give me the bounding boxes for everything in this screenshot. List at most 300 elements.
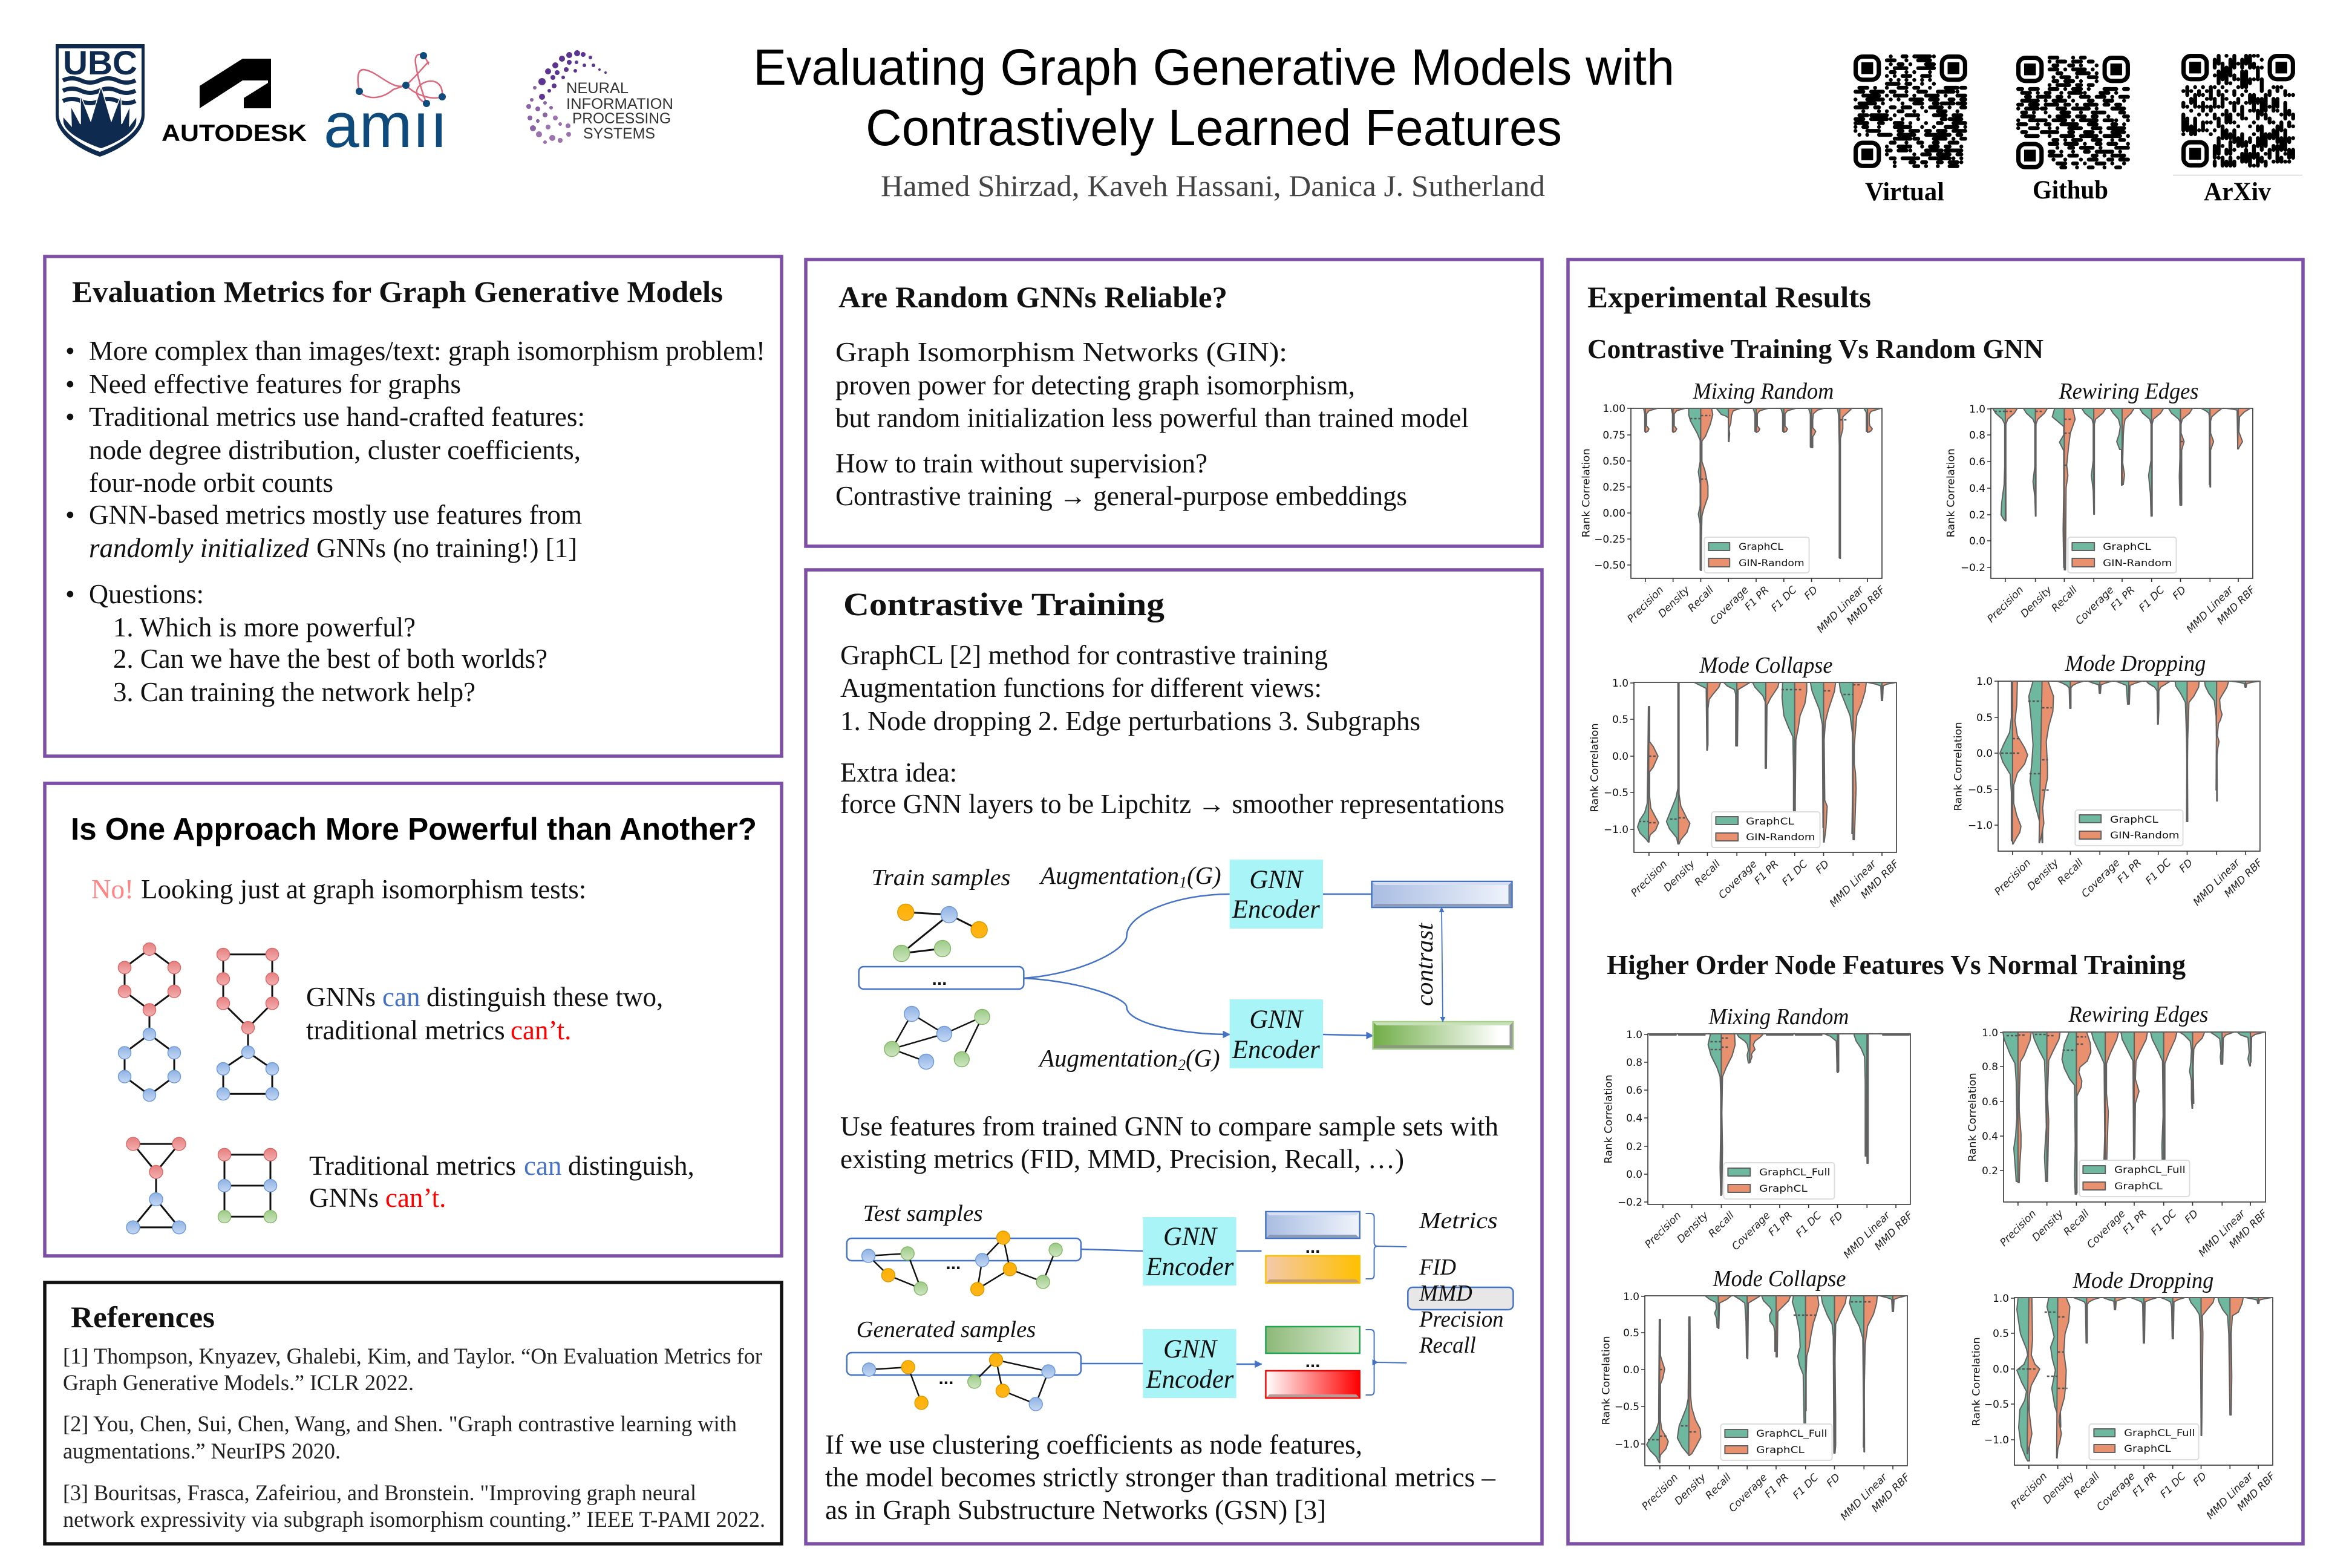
sample batch box (859, 967, 1024, 989)
title (753, 39, 1674, 156)
QR labels (1865, 175, 2302, 206)
reference list: augmentations.” NeurIPS 2020. (63, 1439, 341, 1464)
panel: experimental results (1568, 260, 2303, 1544)
body text: Graph Isomorphism Networks (GIN): (835, 337, 1287, 367)
chart: mode dropping (GraphCL_Full vs GraphCL): MMD Linear (2204, 1469, 2256, 1521)
intro text: Augmentation functions for different views: (840, 673, 1322, 703)
panel: contrastive training (806, 570, 1542, 1544)
logo: Neural Information Processing Systems: PROCESSING (572, 110, 671, 127)
chart: rewiring edges (GraphCL_Full vs GraphCL): MMD RBF (2227, 1207, 2270, 1250)
test samples batch (847, 1231, 1081, 1296)
chart: rewiring edges (GraphCL_Full vs GraphCL): 0.4 (1982, 1130, 1998, 1142)
chart: mode dropping (GraphCL vs GIN-Random): 1.0 (1976, 675, 1993, 687)
chart: mode dropping (GraphCL_Full vs GraphCL): Density (2040, 1469, 2077, 1506)
chart: mode dropping (GraphCL_Full vs GraphCL): MMD RBF (2235, 1469, 2278, 1513)
chart: mode dropping (GraphCL_Full vs GraphCL): −0.5 (1984, 1398, 2009, 1410)
label: augmentation 2: (G) (1186, 1045, 1220, 1072)
chart: mode collapse (GraphCL vs GIN-Random): F1 PR (1752, 858, 1781, 887)
title: Evaluating Graph Generative Models with (753, 39, 1674, 96)
chart: rewiring edges (GraphCL vs GIN-Random): 0.0 (1969, 535, 1985, 547)
embedding bar: blue (1372, 881, 1512, 907)
reference list: network expressivity via subgraph isomorphism counting.” IEEE T-PAMI 2022. (63, 1508, 765, 1532)
chart: mode collapse (GraphCL_Full vs GraphCL): F1 DC (1791, 1471, 1821, 1501)
sample graph 1 (893, 904, 987, 962)
label: test samples: Test samples (863, 1201, 983, 1226)
bullet list: Traditional metrics use hand-crafted features: (89, 402, 585, 432)
chart: mode dropping (GraphCL vs GIN-Random): 0.0 (1976, 747, 1993, 759)
chart: mode collapse (GraphCL vs GIN-Random): Density (1661, 857, 1697, 893)
generated samples batch: ... (938, 1368, 953, 1388)
chart: rewiring edges (GraphCL vs GIN-Random): 0.8 (1969, 429, 1985, 441)
text: traditional metrics can distinguish: can (524, 1151, 561, 1181)
chart: mode dropping (GraphCL vs GIN-Random): GIN-Random (2110, 829, 2180, 841)
chart: mixing random (GraphCL_Full vs GraphCL): 0.0 (1626, 1168, 1642, 1180)
embedding bars: generated: ... (1305, 1351, 1320, 1371)
chart: rewiring edges (GraphCL vs GIN-Random): MMD Linear (2184, 583, 2236, 635)
logo: amii (324, 52, 448, 161)
chart: mode dropping (GraphCL_Full vs GraphCL) (1970, 1268, 2278, 1521)
chart: mode collapse (GraphCL vs GIN-Random): MMD Linear (1827, 857, 1879, 909)
chart: rewiring edges (GraphCL vs GIN-Random): Recall (2049, 583, 2079, 614)
embedding bars: test (1266, 1212, 1360, 1283)
diagram: contrastive training pipeline (859, 860, 1513, 1074)
GNN encoder test: Encoder (1146, 1253, 1234, 1281)
logo: amii: amıı (324, 90, 448, 161)
chart: mixing random (GraphCL vs GIN-Random): 1.00 (1602, 402, 1625, 414)
chart: mixing random (GraphCL vs GIN-Random): 0.50 (1602, 455, 1625, 467)
chart: mode dropping (GraphCL_Full vs GraphCL): Precision (2008, 1470, 2050, 1511)
chart: mode dropping (GraphCL vs GIN-Random): F1 PR (2115, 857, 2144, 886)
reference list: [2] You, Chen, Sui, Chen, Wang, and Shen. "Graph contrastive learning with (63, 1412, 737, 1437)
middle text: Use features from trained GNN to compare sample sets with (840, 1111, 1498, 1142)
chart: rewiring edges (GraphCL_Full vs GraphCL): Density (2030, 1207, 2066, 1243)
brackets and arrows to metrics (1366, 1214, 1406, 1395)
chart: mixing random (GraphCL vs GIN-Random): Rank Correlation (1579, 448, 1592, 538)
QR code: Virtual (1855, 56, 1965, 166)
chart: mode collapse (GraphCL vs GIN-Random): GraphCL (1746, 815, 1794, 827)
chart: mixing random (GraphCL_Full vs GraphCL): Recall (1706, 1209, 1736, 1240)
GNN encoder 1: GNN (1249, 866, 1304, 894)
chart: mixing random (GraphCL_Full vs GraphCL): F1 PR (1766, 1209, 1795, 1238)
chart: mixing random (GraphCL vs GIN-Random): MMD Linear (1814, 583, 1866, 635)
intro line: No! (91, 874, 134, 904)
chart: mixing random (GraphCL vs GIN-Random): −0.25 (1594, 533, 1625, 545)
chart: mode collapse (GraphCL vs GIN-Random): FD (1813, 858, 1831, 876)
contrast label: contrast (1411, 923, 1438, 1006)
chart: mixing random (GraphCL_Full vs GraphCL): Precision (1642, 1209, 1684, 1250)
intro text: GraphCL [2] method for contrastive training (840, 640, 1328, 670)
chart: mixing random (GraphCL vs GIN-Random): GIN-Random (1739, 557, 1805, 569)
chart: mixing random (GraphCL_Full vs GraphCL): GraphCL (1759, 1183, 1808, 1194)
chart: mixing random (GraphCL vs GIN-Random): Coverage (1708, 584, 1751, 627)
chart: mode dropping (GraphCL_Full vs GraphCL): F1 PR (2130, 1470, 2159, 1499)
graph pair: hexagons (119, 943, 278, 1102)
chart: mode collapse (GraphCL vs GIN-Random): 0.5 (1612, 713, 1628, 725)
chart: mode dropping (GraphCL_Full vs GraphCL): 0.0 (1993, 1363, 2009, 1375)
text: traditional metrics can distinguish: distinguish, (568, 1151, 694, 1181)
body text: proven power for detecting graph isomorphism, (835, 370, 1355, 400)
closing text: the model becomes strictly stronger than traditional metrics – (825, 1462, 1495, 1492)
chart: mixing random (GraphCL vs GIN-Random): GraphCL (1739, 541, 1783, 552)
chart: mode dropping (GraphCL_Full vs GraphCL): 1.0 (1993, 1292, 2009, 1304)
heading: experimental results: Experimental Results (1587, 280, 1871, 314)
chart: mode collapse (GraphCL vs GIN-Random): −0.5 (1604, 786, 1628, 799)
panel: references (45, 1282, 782, 1544)
chart: mixing random (GraphCL vs GIN-Random): 0.00 (1602, 507, 1625, 519)
metric labels: FID (1419, 1255, 1456, 1280)
body text: Contrastive training → general-purpose embeddings (835, 481, 1407, 511)
chart: mode collapse (GraphCL_Full vs GraphCL) (1599, 1266, 1912, 1523)
chart: mode dropping (GraphCL_Full vs GraphCL): GraphCL (2124, 1443, 2171, 1454)
panel: are random GNNs reliable (806, 260, 1542, 546)
logo: UBC shield: UBC (63, 44, 137, 82)
bullet list: • (65, 579, 75, 609)
heading: references: References (71, 1300, 215, 1334)
chart: rewiring edges (GraphCL vs GIN-Random): F1 PR (2108, 584, 2137, 613)
chart: rewiring edges (GraphCL_Full vs GraphCL): 0.8 (1982, 1060, 1998, 1073)
chart: rewiring edges (GraphCL vs GIN-Random): MMD RBF (2215, 583, 2258, 627)
chart: mode dropping (GraphCL vs GIN-Random): FD (2177, 857, 2195, 875)
label: generated samples: Generated samples (857, 1317, 1036, 1342)
chart: mode collapse (GraphCL vs GIN-Random): −1.0 (1604, 823, 1628, 835)
chart: mixing random (GraphCL vs GIN-Random): Density (1656, 583, 1692, 619)
label: augmentation 1: (G) (1187, 862, 1221, 889)
chart: rewiring edges (GraphCL_Full vs GraphCL): Recall (2061, 1207, 2091, 1238)
chart: mixing random (GraphCL_Full vs GraphCL): Mixing Random (1708, 1004, 1849, 1030)
body text: How to train without supervision? (835, 448, 1207, 479)
chart: rewiring edges (GraphCL vs GIN-Random): −0.2 (1961, 561, 1985, 573)
chart: rewiring edges (GraphCL_Full vs GraphCL): GraphCL (2114, 1180, 2163, 1192)
chart: mode collapse (GraphCL_Full vs GraphCL): GraphCL_Full (1756, 1428, 1828, 1440)
chart: mode dropping (GraphCL vs GIN-Random) (1952, 651, 2265, 908)
GNN encoder 2 (1230, 999, 1323, 1068)
chart: rewiring edges (GraphCL_Full vs GraphCL): 0.6 (1982, 1096, 1998, 1108)
contrast arrow (1442, 907, 1443, 1022)
bullet list: More complex than images/text: graph isomorphism problem! (89, 336, 765, 366)
chart: rewiring edges (GraphCL vs GIN-Random): Rewiring Edges (2059, 379, 2198, 404)
embedding bars: test: ... (1305, 1237, 1320, 1257)
bullet list (65, 336, 765, 707)
chart: mode collapse (GraphCL vs GIN-Random): Coverage (1716, 858, 1759, 901)
GNN encoder generated: Encoder (1146, 1365, 1234, 1394)
chart: mixing random (GraphCL_Full vs GraphCL) (1602, 1004, 1915, 1261)
logo: UBC shield (56, 44, 145, 157)
metric labels: Recall (1419, 1333, 1476, 1358)
GNN encoder test (1143, 1217, 1236, 1285)
chart: rewiring edges (GraphCL vs GIN-Random): 1.0 (1969, 403, 1985, 415)
chart: rewiring edges (GraphCL_Full vs GraphCL): FD (2182, 1207, 2200, 1226)
chart: mode dropping (GraphCL vs GIN-Random): GraphCL (2110, 814, 2158, 825)
embedding bar: green (1373, 1022, 1513, 1049)
label: augmentation 2: Augmentation (1039, 1045, 1178, 1072)
intro text: 1. Node dropping 2. Edge perturbations 3. Subgraphs (840, 706, 1420, 736)
logo: Autodesk (162, 59, 307, 146)
metric labels: Precision (1419, 1307, 1504, 1332)
bullet list: Need effective features for graphs (89, 369, 461, 399)
panel: evaluation metrics (45, 256, 782, 756)
chart: mixing random (GraphCL vs GIN-Random): 0.75 (1602, 429, 1625, 441)
chart: mode dropping (GraphCL_Full vs GraphCL): −1.0 (1984, 1434, 2009, 1446)
chart: mixing random (GraphCL vs GIN-Random): MMD RBF (1844, 583, 1887, 627)
chart: mode collapse (GraphCL vs GIN-Random): GIN-Random (1746, 831, 1815, 843)
heading: contrastive training: Contrastive Training (843, 586, 1165, 622)
chart: mode collapse (GraphCL vs GIN-Random): 0.0 (1612, 750, 1628, 762)
chart: mode dropping (GraphCL vs GIN-Random): −0.5 (1968, 783, 1993, 795)
bullet list: Questions: (89, 579, 204, 609)
chart: mode collapse (GraphCL_Full vs GraphCL): GraphCL (1756, 1444, 1805, 1455)
chart: mode collapse (GraphCL_Full vs GraphCL): Mode Collapse (1713, 1266, 1846, 1292)
chart: mixing random (GraphCL vs GIN-Random): Mixing Random (1693, 379, 1834, 404)
chart: mixing random (GraphCL_Full vs GraphCL): Density (1674, 1209, 1711, 1245)
metric labels (1419, 1208, 1504, 1358)
GNN encoder generated: GNN (1163, 1335, 1218, 1364)
chart: mode collapse (GraphCL_Full vs GraphCL): −0.5 (1615, 1400, 1639, 1413)
metric labels: Metrics (1419, 1208, 1498, 1233)
chart: mode collapse (GraphCL vs GIN-Random): 1.0 (1612, 677, 1628, 689)
GNN encoder 1: Encoder (1232, 895, 1320, 924)
chart: mode collapse (GraphCL_Full vs GraphCL): Recall (1703, 1471, 1733, 1501)
chart: rewiring edges (GraphCL_Full vs GraphCL): F1 PR (2120, 1207, 2149, 1236)
chart: mixing random (GraphCL_Full vs GraphCL): 0.6 (1626, 1084, 1642, 1096)
body text: but random initialization less powerful than trained model (835, 403, 1469, 433)
arrows: encoder to embedding (1323, 894, 1373, 1036)
chart: mixing random (GraphCL vs GIN-Random): F1 PR (1742, 584, 1771, 613)
chart: mixing random (GraphCL vs GIN-Random) (1579, 379, 1887, 635)
chart: mixing random (GraphCL_Full vs GraphCL): 0.2 (1626, 1140, 1642, 1152)
chart: mixing random (GraphCL vs GIN-Random): FD (1802, 584, 1820, 602)
chart: mode collapse (GraphCL_Full vs GraphCL): 0.0 (1623, 1364, 1639, 1376)
sample graph 2 (884, 1007, 990, 1070)
heading: evaluation metrics: Evaluation Metrics for Graph Generative Models (72, 275, 723, 309)
GNN encoder test: GNN (1163, 1223, 1218, 1251)
chart: rewiring edges (GraphCL vs GIN-Random): F1 DC (2137, 584, 2167, 614)
chart: rewiring edges (GraphCL_Full vs GraphCL): MMD Linear (2196, 1207, 2248, 1259)
chart: mixing random (GraphCL vs GIN-Random): Precision (1625, 584, 1666, 625)
chart: mode dropping (GraphCL_Full vs GraphCL): FD (2190, 1470, 2209, 1488)
text: GNNs can distinguish (306, 982, 663, 1045)
chart: mode dropping (GraphCL vs GIN-Random): −1.0 (1968, 819, 1993, 831)
bullet list: four-node orbit counts (89, 468, 333, 498)
QR labels: ArXiv (2204, 178, 2271, 206)
bullet list: GNN-based metrics mostly use features from (89, 500, 582, 530)
chart: rewiring edges (GraphCL vs GIN-Random): 0.2 (1969, 509, 1985, 521)
arrows: augmentation branches (1024, 894, 1230, 1034)
chart: mode collapse (GraphCL_Full vs GraphCL): Coverage (1726, 1471, 1769, 1514)
closing text: as in Graph Substructure Networks (GSN) [3] (825, 1495, 1326, 1525)
chart: mode dropping (GraphCL vs GIN-Random): Density (2025, 856, 2061, 892)
chart: rewiring edges (GraphCL vs GIN-Random): GraphCL (2103, 541, 2151, 552)
QR code: ArXiv (2183, 56, 2293, 166)
embedding bars: generated (1266, 1327, 1360, 1398)
subheading: contrastive vs random: Contrastive Training Vs Random GNN (1587, 333, 2043, 364)
chart: mode collapse (GraphCL_Full vs GraphCL): Precision (1639, 1471, 1681, 1512)
chart: rewiring edges (GraphCL vs GIN-Random): 0.4 (1969, 482, 1985, 494)
chart: mixing random (GraphCL_Full vs GraphCL): −0.2 (1618, 1196, 1642, 1208)
logo: Neural Information Processing Systems: SYSTEMS (583, 125, 655, 142)
bullet list: • (65, 500, 75, 530)
chart: mode collapse (GraphCL_Full vs GraphCL): 0.5 (1623, 1327, 1639, 1339)
generated samples batch (847, 1353, 1081, 1411)
chart: mode dropping (GraphCL_Full vs GraphCL): F1 DC (2158, 1470, 2188, 1500)
GNN encoder 2: GNN (1249, 1005, 1304, 1034)
logo: Neural Information Processing Systems: NEURAL (566, 80, 629, 97)
bullet list: • (65, 402, 75, 432)
text: GNNs can distinguish: distinguish these two, (426, 982, 663, 1012)
chart: mode collapse (GraphCL_Full vs GraphCL): Density (1672, 1471, 1708, 1507)
chart: rewiring edges (GraphCL_Full vs GraphCL): Coverage (2084, 1207, 2128, 1250)
bullet list: 3. Can training the network help? (113, 677, 475, 707)
text: traditional metrics can distinguish: can’t. (385, 1183, 446, 1213)
chart: mode dropping (GraphCL vs GIN-Random): Coverage (2079, 857, 2122, 900)
chart: mode collapse (GraphCL_Full vs GraphCL): Rank Correlation (1599, 1336, 1612, 1425)
bullet list: 1. Which is more powerful? (113, 612, 416, 642)
label: augmentation 2: 2 (1178, 1056, 1186, 1074)
subheading: higher order features: Higher Order Node Features Vs Normal Training (1607, 949, 2186, 980)
chart: mixing random (GraphCL vs GIN-Random): 0.25 (1602, 481, 1625, 493)
text: GNNs can distinguish: traditional metrics (306, 1015, 505, 1045)
bullet list: GNNs (no training!) [1] (316, 533, 577, 563)
closing text: If we use clustering coefficients as node features, (825, 1429, 1362, 1460)
chart: mode dropping (GraphCL_Full vs GraphCL): GraphCL_Full (2124, 1427, 2195, 1439)
chart: mode collapse (GraphCL_Full vs GraphCL): F1 PR (1762, 1471, 1791, 1500)
text: traditional metrics can distinguish (309, 1151, 694, 1213)
graph pair: triangles and ladder (126, 1137, 277, 1234)
chart: mode dropping (GraphCL vs GIN-Random): MMD Linear (2190, 856, 2243, 908)
middle text: existing metrics (FID, MMD, Precision, Recall, …) (840, 1144, 1404, 1174)
intro line: Looking just at graph isomorphism tests: (141, 874, 586, 904)
chart: mixing random (GraphCL_Full vs GraphCL): GraphCL_Full (1759, 1166, 1831, 1178)
chart: mode collapse (GraphCL vs GIN-Random): MMD RBF (1858, 857, 1901, 901)
bullet list: • (65, 336, 75, 366)
chart: rewiring edges (GraphCL vs GIN-Random): FD (2170, 584, 2188, 602)
reference list (63, 1344, 765, 1532)
text: GNNs can distinguish: can’t. (511, 1015, 571, 1045)
chart: mode collapse (GraphCL_Full vs GraphCL): −1.0 (1615, 1438, 1639, 1450)
authors: Hamed Shirzad, Kaveh Hassani, Danica J. Sutherland (881, 169, 1545, 203)
reference list: [3] Bouritsas, Frasca, Zafeiriou, and Bronstein. "Improving graph neural (63, 1481, 696, 1506)
chart: mixing random (GraphCL_Full vs GraphCL): Coverage (1729, 1209, 1772, 1252)
chart: mixing random (GraphCL vs GIN-Random): −0.50 (1594, 559, 1625, 571)
chart: rewiring edges (GraphCL_Full vs GraphCL): Rewiring Edges (2068, 1002, 2208, 1027)
chart: rewiring edges (GraphCL vs GIN-Random): GIN-Random (2103, 557, 2172, 569)
chart: rewiring edges (GraphCL_Full vs GraphCL) (1966, 1002, 2270, 1259)
title: Contrastively Learned Features (866, 99, 1562, 156)
logo: Neural Information Processing Systems (526, 50, 673, 144)
chart: mixing random (GraphCL_Full vs GraphCL): 0.8 (1626, 1056, 1642, 1068)
chart: mode collapse (GraphCL_Full vs GraphCL): MMD RBF (1869, 1471, 1912, 1514)
chart: mode collapse (GraphCL vs GIN-Random): F1 DC (1780, 858, 1810, 888)
GNN encoder generated (1143, 1329, 1236, 1398)
chart: mode dropping (GraphCL vs GIN-Random): Recall (2055, 856, 2085, 887)
chart: rewiring edges (GraphCL_Full vs GraphCL): 0.2 (1982, 1165, 1998, 1177)
metric labels: MMD (1419, 1281, 1472, 1306)
chart: rewiring edges (GraphCL vs GIN-Random): Density (2018, 583, 2054, 619)
reference list: [1] Thompson, Knyazev, Ghalebi, Kim, and Taylor. “On Evaluation Metrics for (63, 1344, 762, 1369)
label: train samples: Train samples (872, 865, 1010, 890)
intro text: force GNN layers to be Lipchitz → smoother representations (840, 789, 1504, 819)
closing text (825, 1429, 1495, 1525)
chart: mixing random (GraphCL_Full vs GraphCL): 1.0 (1626, 1028, 1642, 1040)
chart: mixing random (GraphCL_Full vs GraphCL): MMD Linear (1841, 1209, 1893, 1261)
bullet list: • (65, 369, 75, 399)
chart: mode dropping (GraphCL_Full vs GraphCL): Rank Correlation (1970, 1337, 1982, 1426)
arrows: samples to encoders (1081, 1249, 1261, 1364)
chart: rewiring edges (GraphCL vs GIN-Random): 0.6 (1969, 456, 1985, 468)
body text (835, 337, 1469, 511)
diagram: metric evaluation pipeline (847, 1201, 1513, 1411)
reference list: Graph Generative Models.” ICLR 2022. (63, 1371, 414, 1396)
chart: mixing random (GraphCL_Full vs GraphCL): F1 DC (1794, 1209, 1824, 1240)
bullet list: 2. Can we have the best of both worlds? (113, 644, 547, 674)
text: GNNs can distinguish: GNNs (306, 982, 376, 1012)
bullet list: node degree distribution, cluster coefficients, (89, 435, 581, 465)
middle text (840, 1111, 1498, 1174)
chart: rewiring edges (GraphCL vs GIN-Random) (1944, 379, 2258, 635)
logo: Autodesk: AUTODESK (162, 120, 307, 146)
chart: mode collapse (GraphCL vs GIN-Random): Precision (1628, 858, 1670, 899)
chart: mixing random (GraphCL vs GIN-Random): Recall (1685, 583, 1716, 614)
label: augmentation 1: 1 (1179, 874, 1187, 891)
chart: mode collapse (GraphCL_Full vs GraphCL): MMD Linear (1838, 1471, 1890, 1523)
chart: rewiring edges (GraphCL_Full vs GraphCL): Rank Correlation (1966, 1073, 1978, 1162)
chart: mode dropping (GraphCL vs GIN-Random): 0.5 (1976, 711, 1993, 724)
chart: mixing random (GraphCL_Full vs GraphCL): 0.4 (1626, 1112, 1642, 1124)
chart: mode dropping (GraphCL_Full vs GraphCL): Coverage (2094, 1470, 2137, 1513)
chart: mode dropping (GraphCL_Full vs GraphCL): Recall (2071, 1469, 2102, 1500)
heading: random GNNs: Are Random GNNs Reliable? (838, 280, 1227, 314)
chart: mixing random (GraphCL vs GIN-Random): F1 DC (1769, 584, 1799, 614)
chart: rewiring edges (GraphCL vs GIN-Random): Precision (1985, 584, 2026, 625)
label: augmentation 1: Augmentation (1040, 862, 1179, 889)
intro text: Extra idea: (840, 757, 957, 788)
chart: mode dropping (GraphCL vs GIN-Random): Precision (1992, 857, 2033, 898)
chart: mixing random (GraphCL_Full vs GraphCL): Rank Correlation (1602, 1074, 1614, 1164)
QR code: Github (2018, 57, 2128, 168)
chart: rewiring edges (GraphCL_Full vs GraphCL): 1.0 (1982, 1027, 1998, 1039)
sample batch box: ... (932, 969, 947, 989)
heading: is one approach: Is One Approach More Powerful than Another? (71, 812, 757, 847)
chart: mode collapse (GraphCL vs GIN-Random): Rank Correlation (1588, 723, 1600, 812)
bullet list: randomly initialized (89, 533, 309, 563)
chart: mixing random (GraphCL_Full vs GraphCL): FD (1827, 1209, 1845, 1227)
chart: mode collapse (GraphCL vs GIN-Random): Mode Collapse (1699, 653, 1832, 678)
chart: mode dropping (GraphCL_Full vs GraphCL): 0.5 (1993, 1327, 2009, 1339)
chart: rewiring edges (GraphCL vs GIN-Random): Coverage (2073, 584, 2116, 627)
QR labels: Virtual (1865, 178, 1944, 206)
metrics highlight box (1408, 1287, 1513, 1310)
chart: mixing random (GraphCL_Full vs GraphCL): MMD RBF (1872, 1209, 1915, 1252)
intro text (840, 640, 1504, 819)
chart: mode collapse (GraphCL vs GIN-Random) (1588, 653, 1901, 909)
chart: mode collapse (GraphCL_Full vs GraphCL): FD (1824, 1471, 1842, 1489)
logo: Neural Information Processing Systems: INFORMATION (566, 96, 673, 113)
chart: mode dropping (GraphCL_Full vs GraphCL): Mode Dropping (2073, 1268, 2213, 1293)
chart: mode dropping (GraphCL vs GIN-Random): MMD RBF (2222, 856, 2265, 900)
text: GNNs can distinguish: can (382, 982, 420, 1012)
text: traditional metrics can distinguish: GNNs (309, 1183, 379, 1213)
QR labels: Github (2033, 176, 2108, 204)
chart: rewiring edges (GraphCL vs GIN-Random): Rank Correlation (1944, 448, 1956, 538)
chart: mode collapse (GraphCL_Full vs GraphCL): 1.0 (1623, 1290, 1639, 1302)
chart: mode collapse (GraphCL vs GIN-Random): Recall (1692, 857, 1722, 888)
chart: rewiring edges (GraphCL_Full vs GraphCL): F1 DC (2149, 1207, 2179, 1238)
text: traditional metrics can distinguish: Traditional metrics (309, 1151, 516, 1181)
panel: is one approach more powerful (45, 783, 782, 1256)
chart: mode dropping (GraphCL vs GIN-Random): Mode Dropping (2065, 651, 2206, 676)
chart: rewiring edges (GraphCL_Full vs GraphCL): GraphCL_Full (2114, 1164, 2186, 1176)
test samples batch: ... (946, 1253, 961, 1273)
chart: rewiring edges (GraphCL_Full vs GraphCL): Precision (1998, 1207, 2039, 1249)
